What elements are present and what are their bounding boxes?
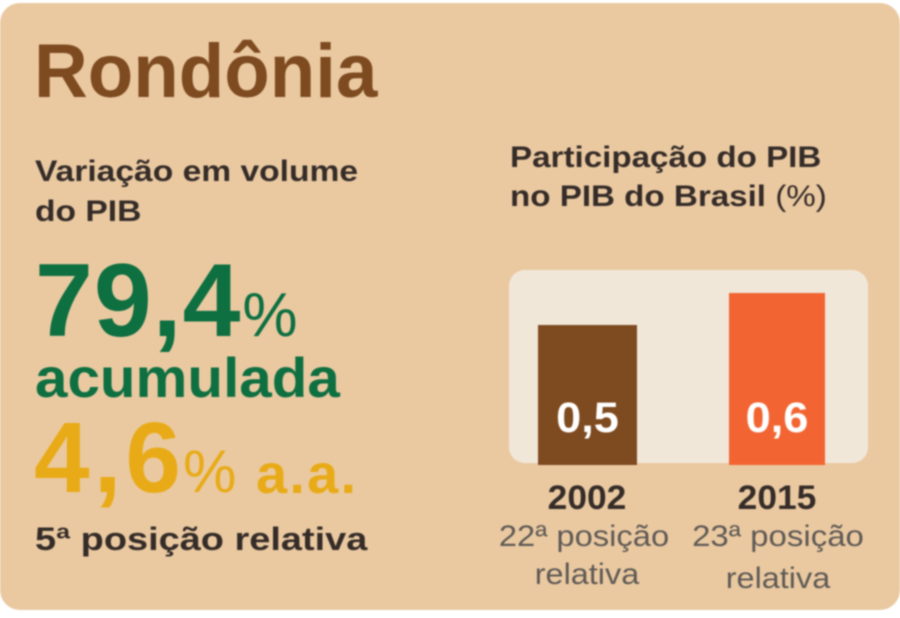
column label: 2002 [499,479,669,591]
relativa 2015: relativa [726,562,830,595]
column label: 2015 [692,479,864,595]
stat: 79,4%: 79,4% [35,243,298,359]
value 4,6: 4,6 [34,402,185,514]
bar: 2015 [729,293,825,465]
heading: variação: do PIB [35,195,141,228]
year 2015: 2015 [738,479,816,517]
title: Rondônia [34,29,377,114]
heading: participação: no PIB do Brasil (%) [510,180,827,213]
percent sign: % [183,438,236,505]
position 2002: 22ª posição [499,520,669,553]
value: 0,5: 0,5 [556,394,619,442]
relativa 2002: relativa [535,558,639,591]
label: 5ª posição relativa: 5ª posição relativa [35,521,367,557]
value: 0,6: 0,6 [746,394,808,442]
heading: variação: Variação em volume [35,155,358,188]
label: acumulada: acumulada [35,346,340,409]
position 2015: 23ª posição [692,520,864,553]
stat: 4,6% a.a. [34,402,358,514]
bar: 2002 [538,325,637,465]
heading: participação: Participação do PIB [510,141,821,174]
heading: variação [34,155,358,228]
heading: participação [510,141,827,213]
a.a.: a.a. [256,442,358,505]
year 2002: 2002 [548,479,626,517]
bar chart [509,270,868,463]
